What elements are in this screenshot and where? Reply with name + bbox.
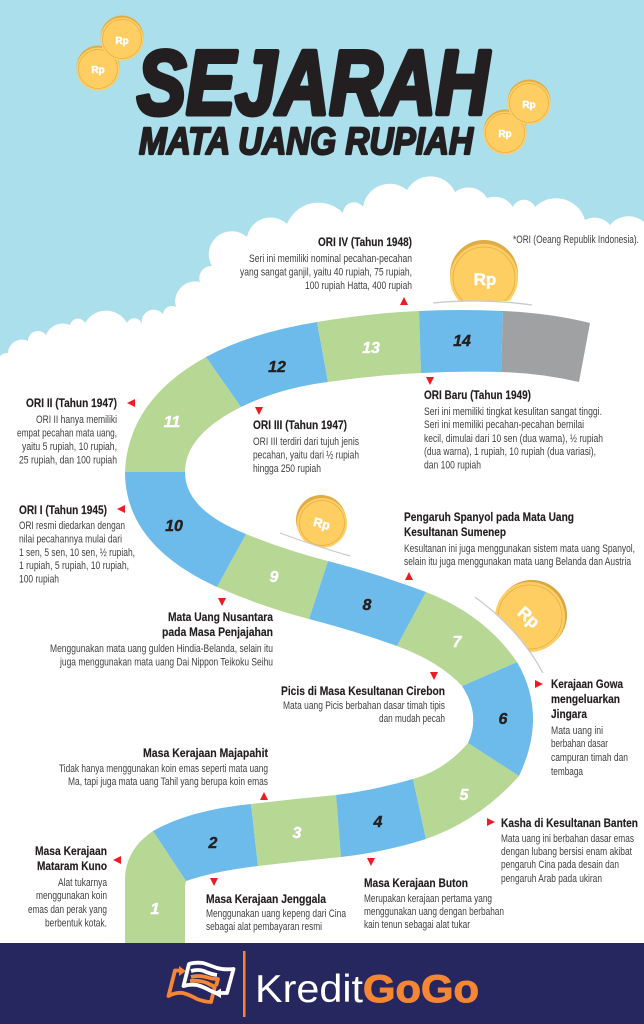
callout: ORI II: 25 rupiah, dan 100 rupiah (19, 454, 117, 466)
segment 2: 2 (208, 835, 218, 852)
callout: Picis Cirebon (281, 672, 445, 725)
callout: Pengaruh Spanyol (404, 510, 635, 580)
logo: KreditGoGo: GoGo (363, 968, 479, 1011)
callout: Mataram Kuno: Mataram Kuno (37, 859, 107, 873)
callout: Mataram Kuno: Masa Kerajaan (35, 844, 107, 858)
callout: Mataram Kuno: emas dan perak yang (28, 904, 107, 916)
callout: Buton: menggunakan uang dengan berbahan (364, 906, 504, 918)
callout: Mata Uang Nusantara: juga menggunakan mata uang Dai Nippon Teikoku Seihu (59, 656, 273, 668)
segment 11: 11 (164, 414, 180, 431)
icon: coin near segment 9: Rp (312, 515, 332, 533)
winding road (125, 310, 590, 943)
icon: coin near segment 9 (280, 495, 350, 575)
title: MATA UANG RUPIAH (139, 121, 474, 163)
callout: Kerajaan Gowa: Jingara (551, 707, 587, 721)
segment 10 (125, 472, 246, 587)
segment 8 (309, 561, 426, 646)
segment 8: 8 (363, 597, 372, 614)
segment 6: 6 (499, 711, 508, 728)
segment 14 (419, 310, 503, 373)
callout: Kasha Banten (487, 816, 638, 885)
icon: large coin on segment 14 (430, 240, 540, 312)
icon: coins top right: Rp (522, 100, 536, 111)
callout: Buton: kain tenun sebagai alat tukar (364, 919, 470, 931)
segment 1 (125, 831, 186, 943)
segment end grey (501, 311, 590, 382)
segment 2 (153, 804, 258, 881)
callout: ORI Baru: Seri ini memiliki pecahan-pecahan bernilai (424, 419, 584, 431)
sky background (0, 0, 644, 362)
callout: ORI I: nilai pecahannya mulai dari (19, 534, 122, 546)
segment 4: 4 (373, 814, 383, 831)
segment 5: 5 (460, 787, 470, 804)
callout: Mata Uang Nusantara: pada Masa Penjajahan (162, 625, 273, 639)
callout: ORI II: empat pecahan mata uang, (17, 428, 117, 440)
segment 13 (317, 311, 421, 382)
segment 7 (397, 592, 517, 686)
callout: ORI I: ORI I (Tahun 1945) (19, 503, 107, 517)
callout: ORI IV: ORI IV (Tahun 1948) (318, 235, 412, 249)
segment 11 (125, 357, 241, 472)
callout: Mata Uang Nusantara (50, 598, 273, 668)
callout: Jenggala: sebagai alat pembayaran resmi (206, 921, 322, 933)
callout: Kerajaan Gowa: tembaga (551, 766, 584, 778)
icon: coin near segment 7: Rp (514, 603, 543, 632)
callout: ORI IV: yang sangat ganjil, yaitu 40 rupiah, 75 rupiah, (240, 266, 412, 278)
segment 10: 10 (165, 518, 183, 535)
title: SEJARAH (137, 33, 491, 134)
segment 12 (206, 322, 328, 407)
icon: coins top right (484, 80, 550, 154)
callout: ORI I: 1 sen, 5 sen, 10 sen, ½ rupiah, (19, 547, 135, 559)
segment 3 (251, 795, 341, 866)
icon: coins top left (76, 16, 144, 90)
callout: Pengaruh Spanyol: Kesultanan Sumenep (404, 525, 506, 539)
callout: ORI I: ORI resmi diedarkan dengan (19, 520, 125, 532)
footer band (0, 943, 644, 1024)
callout: Picis Cirebon: Mata uang Picis berbahan dasar timah tipis (283, 700, 445, 712)
callout: ORI II (17, 396, 135, 466)
segment 4 (336, 779, 426, 857)
callout: Kasha Banten: pengaruh Arab pada ukiran (501, 873, 602, 885)
callout: Majapahit: Ma, tapi juga mata uang Tahil yang berupa koin emas (68, 776, 268, 788)
segment 14: 14 (453, 333, 471, 350)
callout: Buton: Merupakan kerajaan pertama yang (364, 893, 492, 905)
callout: ORI IV (240, 235, 412, 305)
callout: Mataram Kuno: berbentuk kotak. (45, 918, 107, 930)
callout: Jenggala: Masa Kerajaan Jenggala (206, 892, 326, 906)
segment 7: 7 (453, 634, 463, 651)
callout: ORI III: ORI III terdiri dari tujuh jenis (253, 436, 359, 448)
callout: ORI III: pecahan, yaitu dari ½ rupiah (253, 450, 359, 462)
icon: coins top right: Rp (498, 129, 512, 140)
logo: KreditGoGo: Kredit (255, 968, 363, 1011)
callout: Picis Cirebon: dan mudah pecah (379, 713, 445, 725)
callout: Kerajaan Gowa: berbahan dasar (551, 738, 608, 750)
callout: Mata Uang Nusantara: Mata Uang Nusantara (168, 610, 273, 624)
logo: KreditGoGo (168, 951, 479, 1017)
callout: Majapahit: Masa Kerajaan Majapahit (143, 746, 268, 760)
callout: ORI II: ORI II hanya memiliki (36, 414, 117, 426)
callout: ORI I (19, 503, 135, 586)
callout: Buton (364, 858, 504, 931)
callout: Kerajaan Gowa: Mata uang ini (551, 725, 603, 737)
clouds (0, 176, 644, 362)
callout: Mataram Kuno: Alat tukarnya (58, 877, 108, 889)
callout: ORI II: ORI II (Tahun 1947) (26, 396, 117, 410)
segment 3: 3 (293, 825, 302, 842)
callout: ORI Baru (424, 377, 603, 472)
callout: ORI II: yaitu 5 rupiah, 10 rupiah, (22, 441, 117, 453)
callout: Majapahit: Tidak hanya menggunakan koin emas seperti mata uang (59, 763, 268, 775)
icon: large coin on segment 14: Rp (474, 270, 496, 289)
segment 13: 13 (362, 340, 380, 357)
callout: ORI IV: 100 rupiah Hatta, 400 rupiah (305, 280, 412, 292)
callout: ORI I: 100 rupiah (19, 574, 59, 586)
callout: ORI III: hingga 250 rupiah (253, 463, 321, 475)
segment 1: 1 (151, 901, 160, 918)
callout: Majapahit (59, 746, 268, 800)
callout: Pengaruh Spanyol: Pengaruh Spanyol pada Mata Uang (404, 510, 574, 524)
callout: Buton: Masa Kerajaan Buton (364, 876, 468, 890)
callout: ORI III: ORI III (Tahun 1947) (253, 418, 347, 432)
callout: Jenggala (206, 878, 347, 933)
callout: Kerajaan Gowa: Kerajaan Gowa (551, 677, 623, 691)
callout: ORI Baru: ORI Baru (Tahun 1949) (424, 388, 531, 402)
segment 6 (462, 662, 533, 776)
callout: ORI IV: Seri ini memiliki nominal pecahan-pecahan (249, 253, 412, 265)
callout: ORI I: 1 rupiah, 5 rupiah, 10 rupiah, (19, 560, 129, 572)
callout: Kerajaan Gowa: mengeluarkan (551, 692, 620, 706)
title (137, 33, 491, 163)
callout: Picis Cirebon: Picis di Masa Kesultanan Cirebon (281, 684, 445, 698)
callout: Mataram Kuno (28, 844, 121, 930)
callout: ORI Baru: (dua warna), 1 rupiah, 10 rupiah (dua variasi), (424, 446, 596, 458)
callout: ORI III (253, 407, 359, 475)
callout: Mata Uang Nusantara: Menggunakan mata uang gulden Hindia-Belanda, selain itu (50, 643, 273, 655)
segment 9 (217, 534, 328, 619)
segment 12: 12 (268, 359, 286, 376)
callout: Mataram Kuno: menggunakan koin (36, 890, 107, 902)
icon: flag with arrows (168, 963, 234, 1002)
callout: ORI Baru: dan 100 rupiah (424, 460, 481, 472)
segment 5 (413, 743, 519, 839)
icon: coins top left: Rp (91, 65, 105, 76)
segment 9: 9 (270, 569, 279, 586)
icon: coin near segment 7 (460, 580, 567, 690)
callout: Jenggala: Menggunakan uang kepeng dari Cina (206, 908, 347, 920)
callout: Kerajaan Gowa (535, 677, 628, 778)
icon: coins top left: Rp (115, 36, 129, 47)
